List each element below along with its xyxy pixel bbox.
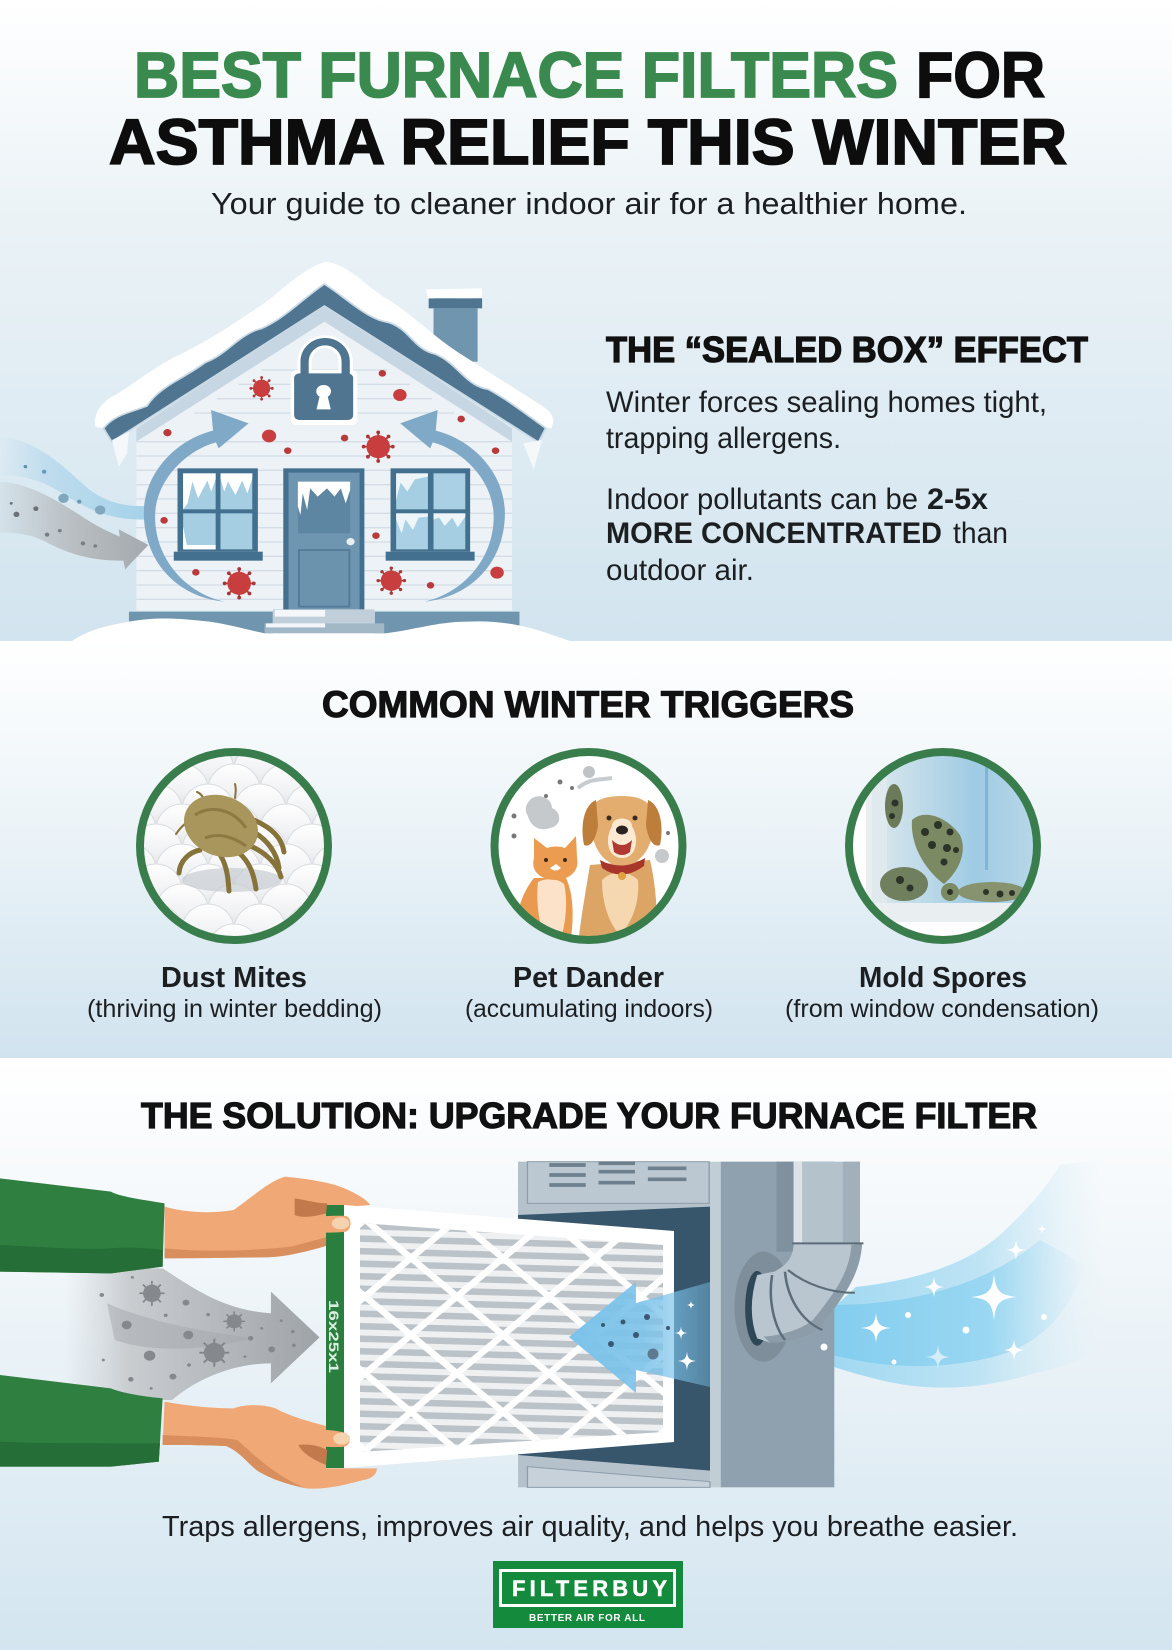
circular air arrows [144,410,505,602]
dog [578,796,662,945]
air filter [326,1205,674,1468]
sparkles [674,1224,1047,1370]
caption: Traps allergens, improves air quality, and helps you breathe easier. [162,1511,1018,1543]
heading: the solution: THE SOLUTION: UPGRADE YOUR FURNACE FILTER [141,1095,1037,1136]
paragraph: indoor pollutants: MORE CONCENTRATED [606,517,942,550]
house wall with siding [136,305,512,611]
dander clouds [512,766,670,863]
logo: filterbuy: BETTER AIR FOR ALL [529,1613,645,1624]
section background: sealed box [0,0,1172,641]
title [109,39,1067,178]
filter pleats [360,1223,663,1452]
illustration: snowy sealed house [0,262,572,642]
trigger label: dust mites: (thriving in winter bedding) [87,995,382,1023]
cat [520,836,578,934]
icon: padlock [291,342,357,425]
gray dirty air arrow [65,1268,320,1400]
upper thumb [283,1198,351,1233]
eave icicles [112,432,542,470]
duct pipe [734,1162,863,1362]
red allergen particles [160,370,504,599]
foundation and steps [129,609,519,634]
thumbs [283,1198,351,1465]
subtitle: Your guide to cleaner indoor air for a healthier home. [211,186,967,221]
arms and sleeves [0,1177,377,1489]
door [283,468,364,610]
lower thumb [283,1427,350,1465]
section background: triggers [0,641,1172,1058]
incoming gray polluted air arrow [0,482,148,569]
paragraph: winter sealing: Winter forces sealing homes tight, [606,386,1047,419]
trigger icon: mold spores [849,750,1047,940]
logo: filterbuy [493,1561,683,1628]
sealed box text [606,329,1088,587]
furnace cabinet [518,1162,834,1487]
mold patches [880,784,1026,902]
chimney [426,288,482,362]
trigger icon: pet dander [494,752,682,945]
lower sleeve [0,1375,163,1467]
clean air flow [791,1150,1172,1388]
window left [174,468,263,561]
snow on roof [95,262,553,430]
logo: filterbuy: FILTERBUY [512,1576,667,1601]
trigger label: pet dander: Pet Dander [513,962,664,994]
filter size label: 16x25x1 [326,1300,342,1373]
paragraph: winter sealing [606,386,1047,455]
lower arm [163,1402,377,1489]
filter white frame [344,1205,674,1468]
paragraph: indoor pollutants: outdoor air. [606,554,754,587]
ground snow [71,619,572,642]
trigger label: pet dander: (accumulating indoors) [465,995,713,1023]
filter slot opening [518,1207,710,1471]
trigger label: dust mites [87,962,382,1023]
paragraph: indoor pollutants [606,483,1008,587]
heading: sealed box effect: THE “SEALED BOX” EFFECT [606,329,1088,370]
trigger label: dust mites: Dust Mites [161,962,307,994]
paragraph: indoor pollutants: than [953,517,1008,550]
window right [386,468,475,561]
section background: solution [0,1058,1172,1650]
trigger icon: dust mite [140,752,328,940]
title: FOR [916,39,1045,111]
roof [105,285,545,441]
paragraph: indoor pollutants: 2-5x [927,483,988,516]
paragraph: indoor pollutants: Indoor pollutants can be [606,483,918,516]
incoming blue air stream [0,437,146,519]
trigger label: mold spores [785,962,1099,1023]
upper arm [165,1177,370,1258]
trigger label: mold spores: Mold Spores [859,962,1027,994]
paragraph: winter sealing: trapping allergens. [606,422,841,455]
trigger label: pet dander [465,962,713,1023]
heading: common winter triggers: COMMON WINTER TRIGGERS [322,684,854,725]
trigger label: mold spores: (from window condensation) [785,995,1099,1023]
furnace [518,1162,863,1487]
title: BEST FURNACE FILTERS [134,39,898,111]
trapped particles [601,1314,670,1360]
upper sleeve [0,1178,165,1273]
blue clean air arrow into filter [569,1282,710,1393]
title: ASTHMA RELIEF THIS WINTER [109,106,1067,178]
filter green edge [326,1205,344,1468]
